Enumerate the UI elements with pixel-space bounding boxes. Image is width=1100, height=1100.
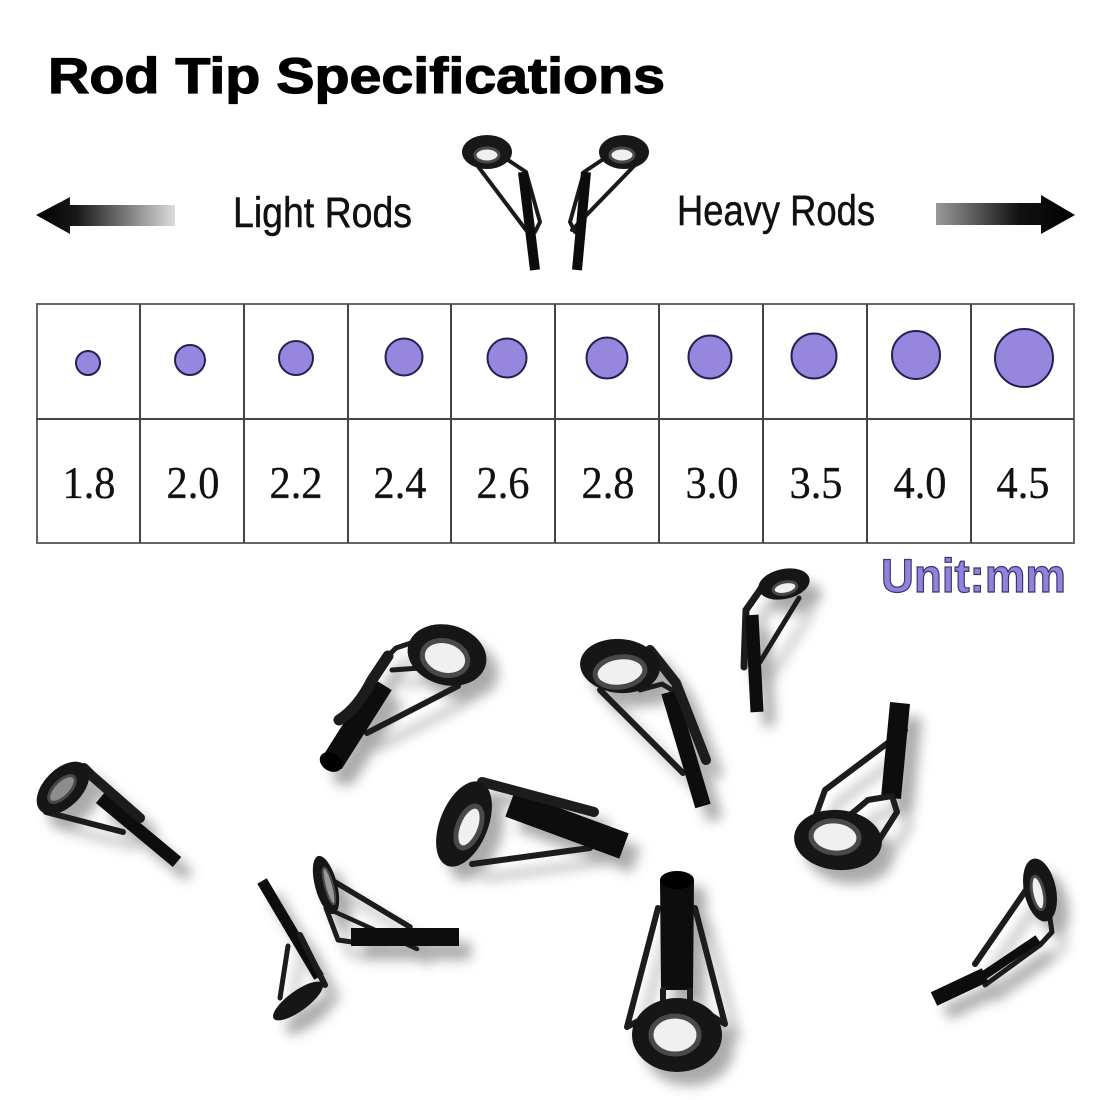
label: light rods: Light Rods <box>233 189 412 237</box>
size values <box>62 458 1050 508</box>
icon: paired rod tips <box>462 135 649 270</box>
size values: 2.4 <box>374 458 426 508</box>
size values: 3.0 <box>686 458 738 508</box>
rod tip: lower middle <box>308 853 459 949</box>
unit label: Unit:mm <box>881 549 1066 602</box>
rod tip: center <box>425 773 624 875</box>
rod tip: upper left <box>316 616 493 776</box>
size values: 2.6 <box>476 458 530 508</box>
rod tip: bottom center <box>627 871 725 1072</box>
rod tip: small lower left <box>262 881 328 1027</box>
size circles <box>76 329 1053 387</box>
size values: 4.5 <box>996 458 1050 508</box>
rod tip: upper center <box>578 636 706 806</box>
size values: 1.8 <box>62 458 116 508</box>
rod tip: right <box>792 703 905 874</box>
size values: 4.0 <box>894 458 946 508</box>
rod tip: small top right <box>744 564 813 712</box>
size values: 2.0 <box>166 458 220 508</box>
arrow: toward heavy rods <box>936 195 1075 234</box>
label: heavy rods: Heavy Rods <box>677 187 875 235</box>
arrow: toward light rods <box>36 197 175 234</box>
size values: 2.2 <box>270 458 322 508</box>
size values: 2.8 <box>582 458 634 508</box>
size values: 3.5 <box>790 458 842 508</box>
rod tip: far left <box>27 752 177 862</box>
title: Rod Tip Specifications <box>48 48 665 104</box>
size table <box>36 304 1074 543</box>
rod tip: far right <box>934 855 1062 999</box>
